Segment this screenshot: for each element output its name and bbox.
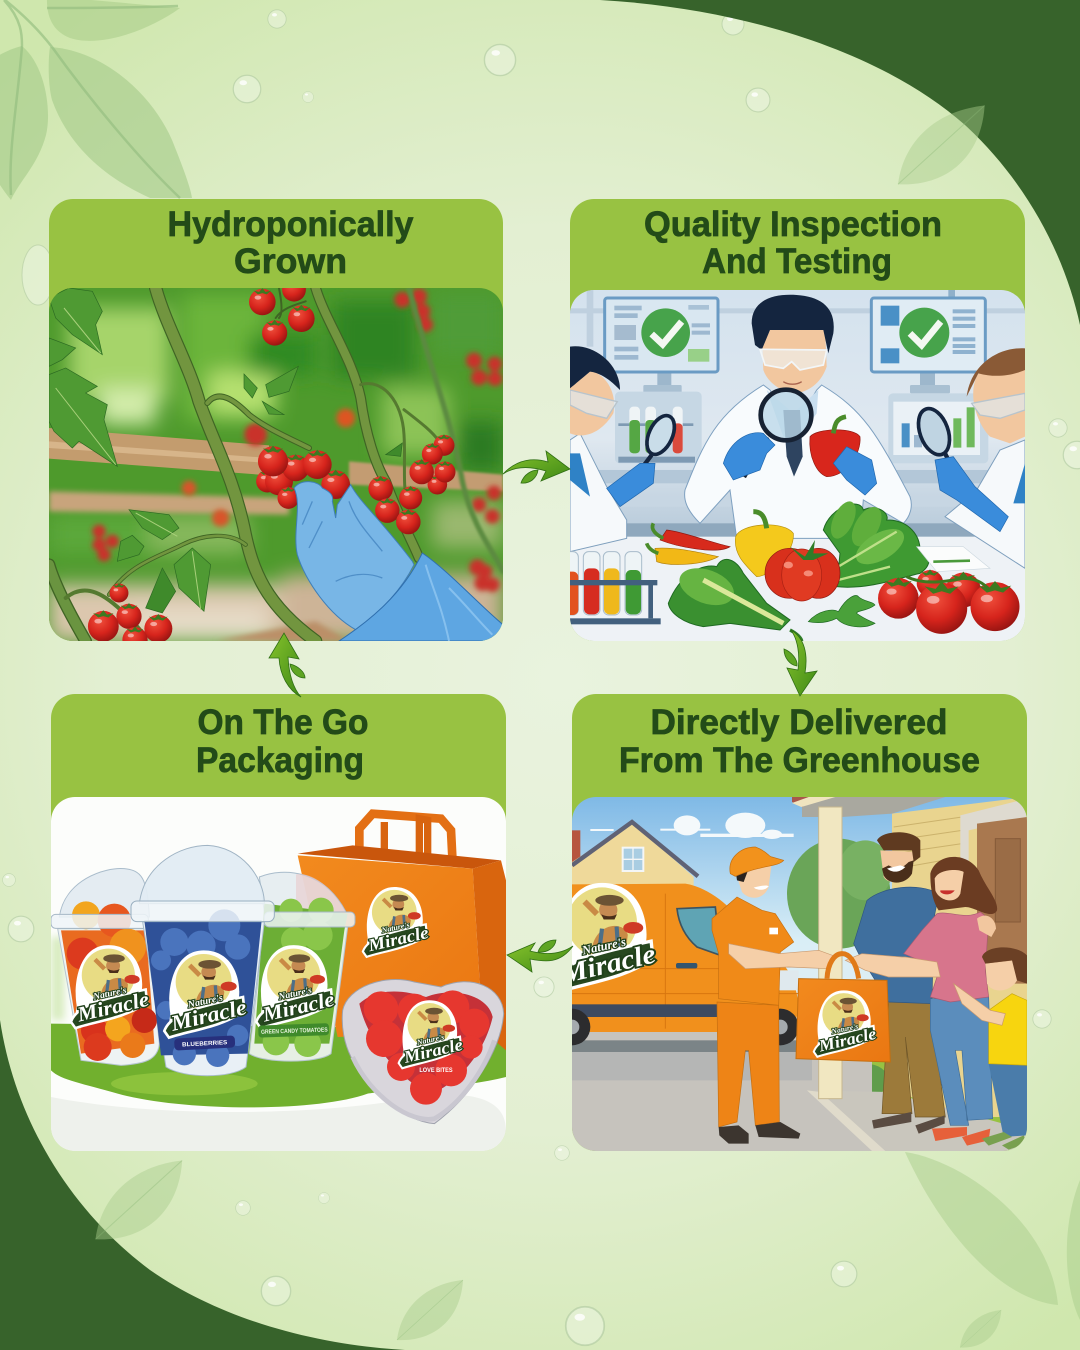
ground xyxy=(572,1032,872,1151)
label: love bites: LOVE BITES xyxy=(419,1068,453,1074)
badge on delivery bag: Nature's xyxy=(830,1022,859,1036)
van xyxy=(554,884,799,1045)
badge on delivery bag xyxy=(814,990,879,1057)
vegetables xyxy=(647,498,1019,641)
gloved hand and sleeve xyxy=(294,482,503,641)
badge on heart pack: Miracle xyxy=(401,1035,465,1067)
grass mat xyxy=(51,1024,506,1107)
vines xyxy=(49,288,503,641)
panel: quality inspection and testing xyxy=(562,199,1025,643)
heart pack xyxy=(342,980,504,1124)
arrow: delivery to packaging xyxy=(507,940,573,972)
label: green candy tomatoes xyxy=(258,1023,329,1038)
panel: hydroponically grown xyxy=(49,199,503,652)
badge on blueberry cup: Nature's xyxy=(186,993,224,1011)
van logo xyxy=(572,882,658,990)
dark green corner top right xyxy=(600,0,1080,325)
tomato clusters xyxy=(88,277,455,652)
test tubes xyxy=(562,552,661,624)
badge on bag: Miracle xyxy=(365,922,431,956)
illustration: home delivery scene xyxy=(553,797,1027,1151)
porch xyxy=(792,797,1027,1151)
illustration: packaged produce xyxy=(51,797,506,1151)
left scientist xyxy=(570,346,680,552)
cup: tomatoes xyxy=(51,869,159,1065)
illustration: tomato vines and gloved hand xyxy=(49,277,503,652)
delivery bag xyxy=(796,954,890,1062)
badge on heart pack: Nature's xyxy=(415,1032,445,1047)
wooden bar xyxy=(49,428,269,475)
heading: quality inspection and testing: And Testing xyxy=(702,242,892,281)
badge on tomato cup: Miracle xyxy=(74,987,151,1027)
heading: on the go packaging: On The Go xyxy=(198,703,368,742)
heading: hydroponically grown: Hydroponically xyxy=(168,205,414,244)
dark green corner bottom left xyxy=(0,1020,405,1350)
cup: green candy tomatoes xyxy=(249,872,355,1061)
label: green candy tomatoes: GREEN CANDY TOMATOES xyxy=(261,1028,328,1036)
monitors xyxy=(605,290,988,463)
mother xyxy=(845,857,997,1146)
heading: quality inspection and testing: Quality Inspection xyxy=(644,205,942,244)
arrow: inspection to delivery xyxy=(784,630,817,696)
cup: blueberries xyxy=(131,845,274,1076)
label: blueberries xyxy=(174,1035,235,1051)
illustration: lab inspection xyxy=(562,290,1025,643)
father xyxy=(854,832,945,1134)
badge on tomato cup xyxy=(71,945,151,1028)
panel: on the go packaging xyxy=(51,694,506,1151)
right scientist xyxy=(913,348,1025,568)
badge on green cup xyxy=(256,945,337,1028)
leaves xyxy=(49,288,402,613)
arrow: packaging to grown xyxy=(269,633,305,697)
heading: hydroponically grown: Grown xyxy=(234,242,347,281)
badge on heart pack xyxy=(399,1000,465,1068)
child xyxy=(954,947,1027,1150)
delivery man xyxy=(712,847,837,1144)
badge on blueberry cup xyxy=(164,950,249,1038)
badge on delivery bag: Miracle xyxy=(816,1024,879,1056)
van logo: Miracle xyxy=(557,939,658,990)
heading: on the go packaging: Packaging xyxy=(196,741,364,780)
van logo: Nature's xyxy=(580,935,627,958)
decorative leaves top left xyxy=(0,0,192,200)
center scientist xyxy=(685,295,911,538)
badge on green cup: Nature's xyxy=(277,986,313,1003)
heading: directly delivered from the greenhouse: Directly Delivered xyxy=(650,703,948,742)
badge on tomato cup: Nature's xyxy=(92,986,128,1003)
badge on blueberry cup: Miracle xyxy=(167,994,249,1036)
label: blueberries: BLUEBERRIES xyxy=(182,1040,228,1048)
trees and bush xyxy=(787,839,890,949)
heading: directly delivered from the greenhouse: From The Greenhouse xyxy=(619,741,980,780)
badge on green cup: Miracle xyxy=(259,987,337,1027)
badge on bag: Nature's xyxy=(380,920,410,935)
house xyxy=(572,822,698,885)
orange bag xyxy=(298,814,506,1050)
panel: directly delivered from the greenhouse xyxy=(553,694,1027,1151)
badge on bag xyxy=(363,887,431,957)
arrow: grown to inspection xyxy=(503,451,570,483)
